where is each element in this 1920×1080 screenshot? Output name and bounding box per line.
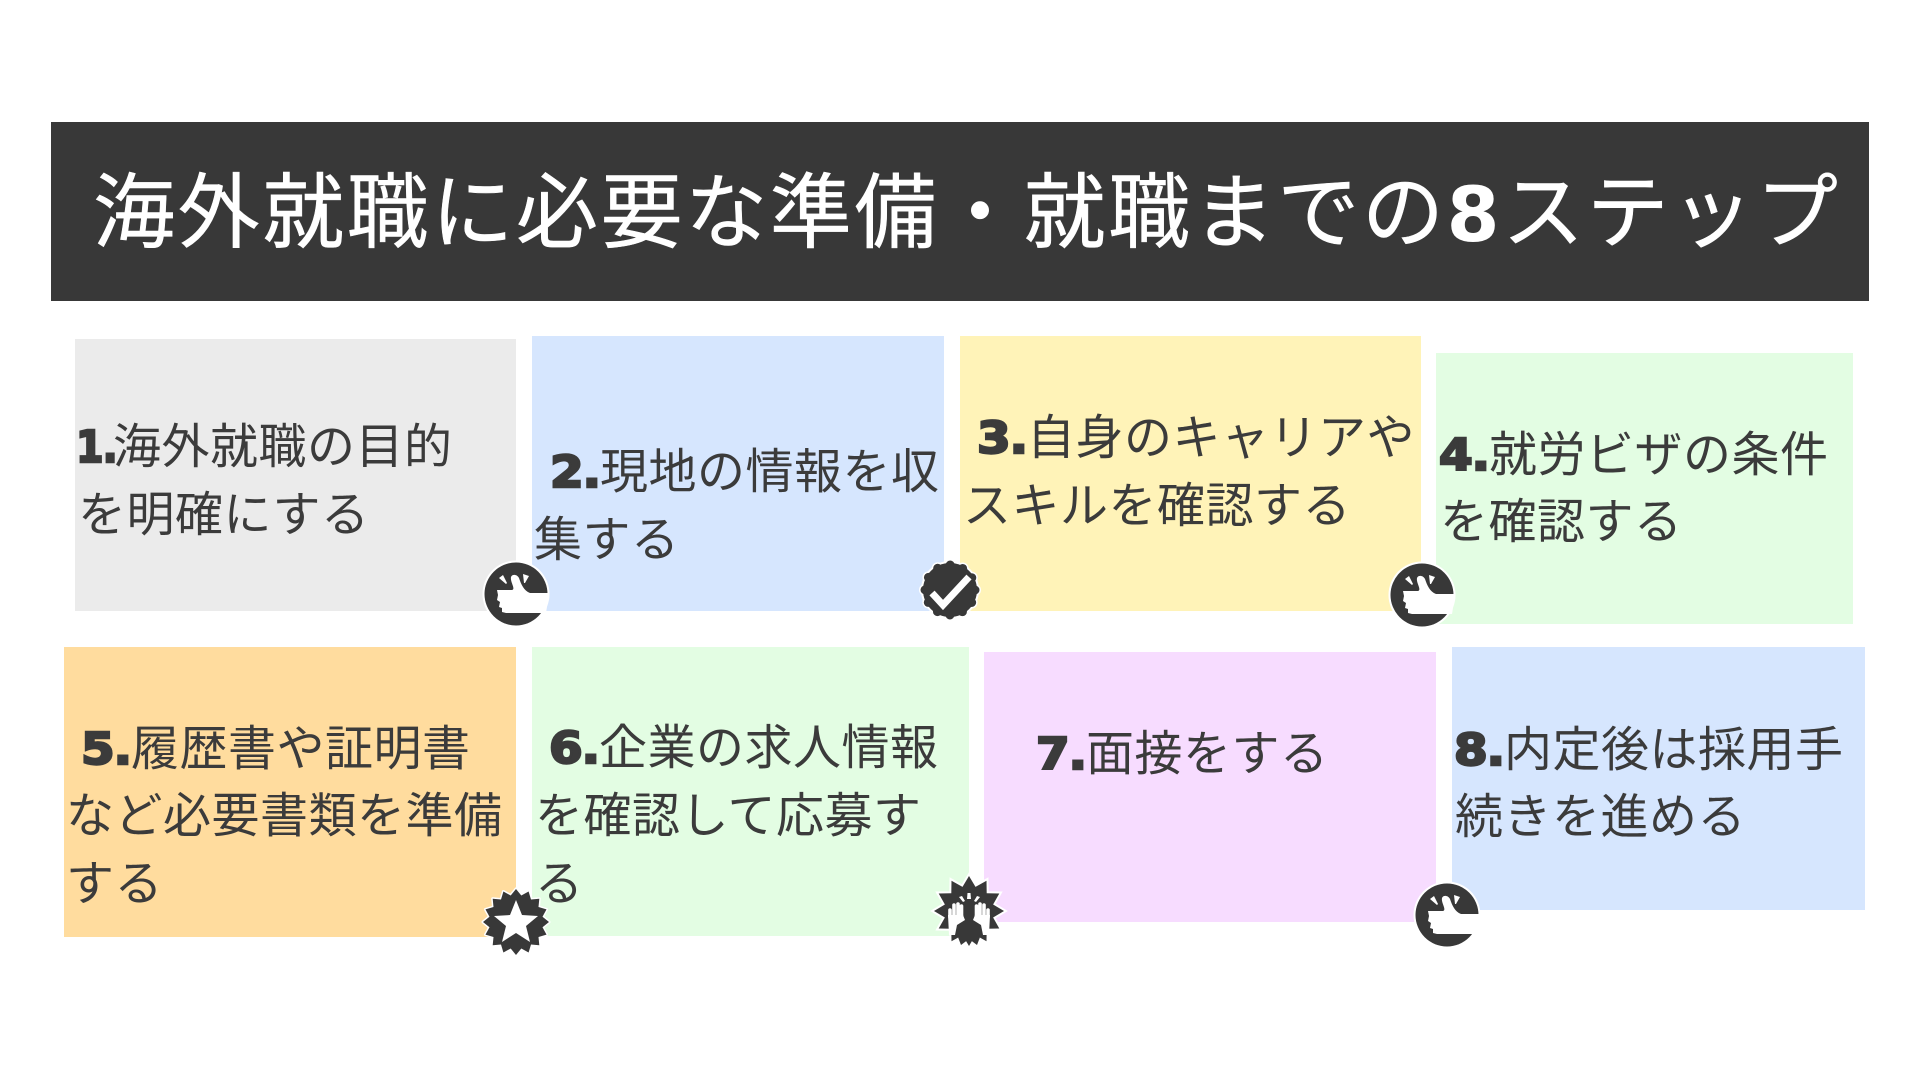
step 5 text: [66, 723, 503, 911]
panel: step 3: [960, 336, 1421, 611]
panel: step 8: [1452, 647, 1865, 910]
icon: thumbs up 1: [482, 560, 550, 626]
step 8 text: [1454, 724, 1844, 844]
icon: check badge: [919, 560, 981, 620]
step 4 text: [1439, 429, 1829, 549]
panel: step 2: [532, 336, 944, 611]
step 2 text: 2.: [550, 447, 600, 498]
title text: 海外就職に必要な準備・就職までの8ステップ: [93, 168, 1840, 259]
step 8 text: 内定後は採用手: [1504, 724, 1844, 777]
step 5 text: 履歴書や証明書: [131, 723, 471, 776]
step 6 text: 6.: [549, 723, 599, 774]
step 3 text: スキルを確認する: [963, 480, 1351, 533]
step 1 text: 1.: [76, 422, 117, 473]
step 4 text: 4.: [1439, 430, 1489, 481]
step 1 text: 海外就職の目的: [113, 421, 453, 474]
step 3 text: [963, 412, 1415, 533]
step 2 text: [534, 446, 940, 567]
step 6 text: [535, 722, 939, 911]
panel: step 1: [75, 339, 516, 611]
step 5 text: 5.: [81, 724, 131, 775]
step 2 text: 現地の情報を収: [600, 446, 940, 499]
panel: step 5: [64, 647, 516, 937]
step 6 text: を確認して応募す: [535, 790, 922, 843]
title banner: [51, 122, 1869, 301]
step 4 text: 就労ビザの条件: [1489, 429, 1829, 482]
step 7 text: 7.: [1036, 729, 1086, 780]
step 6 text: 企業の求人情報: [599, 722, 939, 775]
panel: step 7: [984, 652, 1436, 922]
icon: clapping hands burst: [930, 872, 1008, 946]
step 5 text: する: [66, 858, 163, 911]
step 1 text: [76, 421, 453, 542]
step 2 text: 集する: [534, 514, 680, 567]
step 6 text: る: [535, 858, 584, 911]
step 8 text: 続きを進める: [1455, 791, 1746, 844]
step 3 text: 自身のキャリアや: [1027, 412, 1415, 465]
step 7 text: 面接をする: [1086, 728, 1329, 781]
step 4 text: を確認する: [1440, 496, 1683, 549]
step 3 text: 3.: [977, 413, 1027, 464]
icon: thumbs up 2: [1388, 562, 1456, 626]
panel: step 6: [532, 647, 969, 936]
icon: star badge: [482, 887, 550, 955]
panel: step 4: [1436, 353, 1853, 624]
step 1 text: を明確にする: [78, 489, 369, 542]
icon: thumbs up 3: [1414, 882, 1480, 946]
step 5 text: など必要書類を準備: [66, 790, 503, 843]
step 8 text: 8.: [1454, 725, 1504, 776]
